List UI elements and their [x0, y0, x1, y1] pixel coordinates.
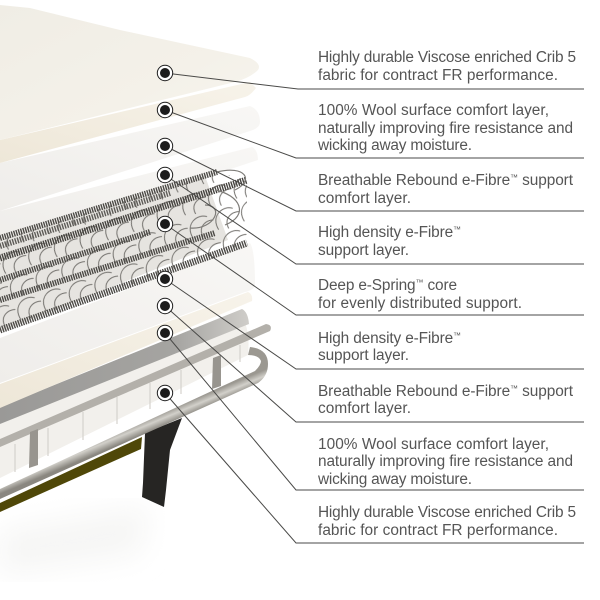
label 5: e-Spring core: ™: [415, 278, 423, 287]
label 1: Crib 5 fabric: [318, 49, 576, 84]
marker 9: [157, 385, 173, 401]
spring interior: [0, 172, 247, 332]
label 6: high density e-Fibre: [318, 330, 461, 364]
label 8: wool layer: 100% Wool surface comfort layer,: [318, 436, 549, 453]
label 2: wool layer: wicking away moisture.: [317, 137, 472, 154]
white support layer, lower: [0, 243, 255, 383]
spring coil rows: [0, 170, 247, 330]
label 9: Crib 5 fabric: [318, 504, 576, 539]
main tube frame: [0, 347, 268, 499]
grey layer: [0, 309, 249, 424]
label 2: wool layer: naturally improving fire resistance and: [318, 120, 573, 137]
label 1: Crib 5 fabric: Highly durable Viscose enriched Crib 5: [318, 49, 576, 66]
label 2: wool layer: 100% Wool surface comfort layer,: [318, 102, 549, 119]
label 3: rebound e-Fibre: comfort layer.: [318, 190, 411, 207]
label 8: wool layer: naturally improving fire resistance and: [318, 453, 573, 470]
label 7: rebound e-Fibre: [318, 383, 574, 417]
label 4: high density e-Fibre: ™: [453, 225, 461, 234]
top fabric layer: [0, 5, 259, 140]
label 6: high density e-Fibre: High density e-Fibre: [318, 330, 453, 347]
cream wool layer, upper: [0, 82, 256, 163]
label 7: rebound e-Fibre: comfort layer.: [318, 400, 411, 417]
label 6: high density e-Fibre: ™: [453, 331, 461, 340]
marker 6: [157, 271, 173, 287]
label 5: e-Spring core: for evenly distributed support.: [318, 295, 522, 312]
label 2: wool layer: [317, 102, 573, 154]
label 4: high density e-Fibre: High density e-Fibre: [318, 224, 453, 241]
label 7: rebound e-Fibre: ™: [510, 384, 518, 393]
leader lines: [165, 73, 584, 543]
label 5: e-Spring core: [318, 277, 522, 312]
floor shadow: [0, 505, 150, 575]
marker 3: [157, 138, 173, 154]
clips: [29, 355, 221, 468]
label 6: high density e-Fibre: support layer.: [318, 347, 409, 364]
marker 7: [157, 298, 173, 314]
label 3: rebound e-Fibre: support: [518, 172, 574, 189]
label 4: high density e-Fibre: [318, 224, 461, 259]
cream wool layer, lower: [0, 292, 252, 408]
quilted fabric panel: [0, 323, 249, 478]
label 9: Crib 5 fabric: Highly durable Viscose enriched Crib 5: [318, 504, 576, 521]
label 1: Crib 5 fabric: fabric for contract FR performance.: [318, 67, 558, 84]
marker 2: [157, 102, 173, 118]
label 9: Crib 5 fabric: fabric for contract FR performance.: [318, 522, 558, 539]
olive base: [0, 437, 142, 512]
label 3: rebound e-Fibre: [318, 172, 574, 207]
label 3: rebound e-Fibre: Breathable Rebound e-Fibre: [318, 172, 510, 189]
mattress illustration: [0, 5, 271, 575]
marker 5: [157, 216, 173, 232]
marker 4: [157, 167, 173, 183]
label 7: rebound e-Fibre: Breathable Rebound e-Fibre: [318, 383, 510, 400]
label 7: rebound e-Fibre: support: [518, 383, 574, 400]
label 5: e-Spring core: Deep e-Spring: [318, 277, 416, 294]
marker 8: [157, 325, 173, 341]
marker 1: [157, 65, 173, 81]
label 4: high density e-Fibre: support layer.: [318, 242, 409, 259]
label 8: wool layer: [317, 436, 573, 488]
label 8: wool layer: wicking away moisture.: [317, 471, 472, 488]
thin rail: [0, 324, 271, 447]
label 3: rebound e-Fibre: ™: [510, 173, 518, 182]
sofa bed leg: [142, 418, 182, 507]
label 5: e-Spring core: core: [423, 277, 457, 294]
white comfort layer: [0, 106, 260, 211]
white layer behind springs: [0, 147, 258, 245]
marker dots: [157, 65, 173, 401]
